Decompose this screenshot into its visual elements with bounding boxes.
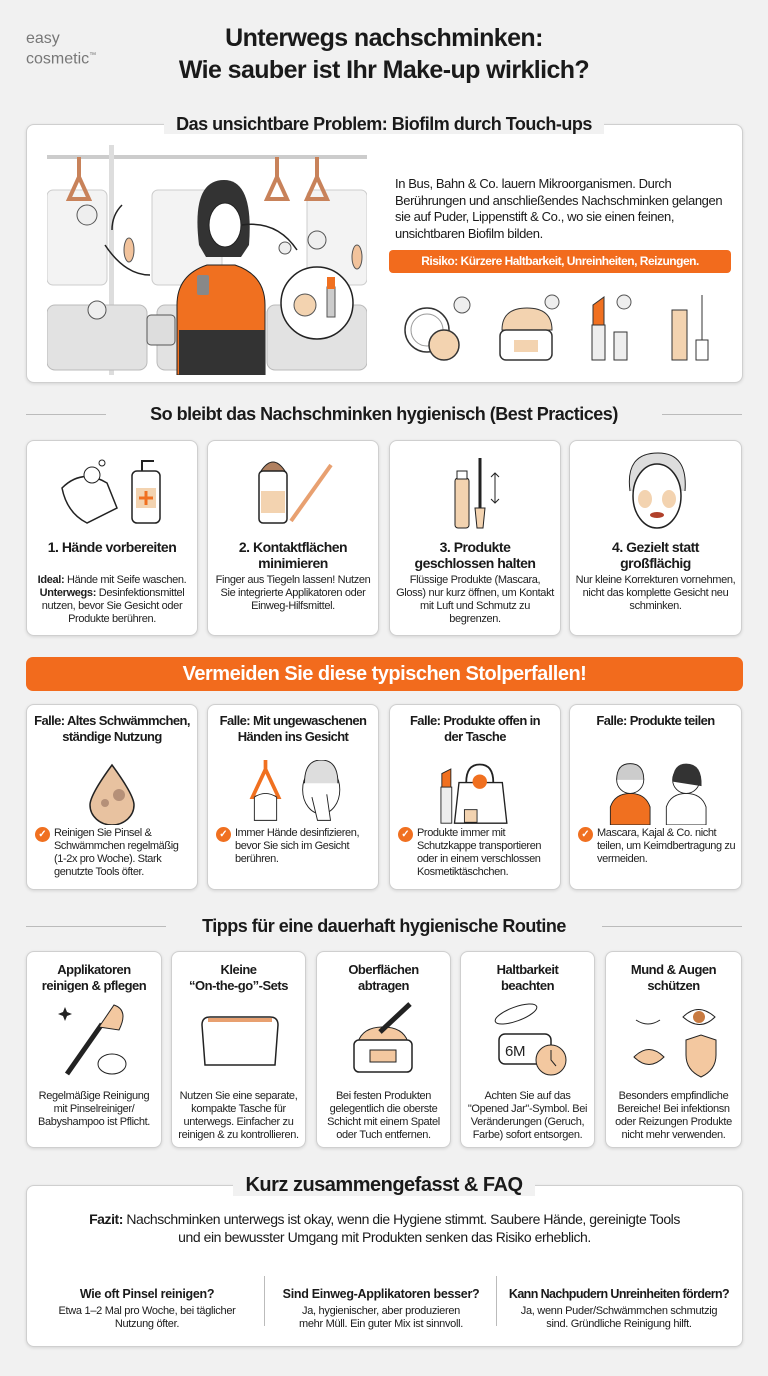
card: Kontaktflächen: minimieren: [258, 555, 328, 571]
icon: two women: [610, 763, 706, 825]
card: Oberflächen: [316, 951, 451, 1148]
heading: tipps: Tipps für eine dauerhaft hygienische Routine: [202, 916, 566, 936]
card: Haltbarkeit: beachten: [501, 978, 554, 993]
card: On-the-go: Kleine: [220, 962, 256, 977]
card: Haltbarkeit: Haltbarkeit: [497, 962, 558, 977]
card: Falle Schwämmchen: [26, 704, 198, 890]
faq 3: Kann Nachpudern Unreinheiten fördern?: [509, 1287, 729, 1301]
banner: Stolperfallen: [26, 657, 743, 691]
icon: bag: [440, 764, 508, 824]
card: Falle Hände: [207, 704, 379, 890]
illustration: bus scene: [47, 145, 367, 375]
card: Falle teilen: [569, 704, 742, 890]
card: Falle teilen: Falle: Produkte teilen: [596, 713, 715, 728]
banner: Stolperfallen: Vermeiden Sie diese typischen Stolperfallen!: [183, 663, 586, 685]
faq 1: Wie oft Pinsel reinigen?: [80, 1287, 214, 1301]
card: Hände vorbereiten: [26, 440, 198, 636]
card: Falle Schwämmchen: Reinigen Sie Pinsel & Schwämmchen regelmäßig (1-2x pro Woche). Stark genutzte Tools öfter.: [54, 827, 178, 878]
card: Applikatoren: Regelmäßige Reinigung mit Pinselreiniger/ Babyshampoo ist Pflicht.: [38, 1090, 150, 1128]
card: On-the-go: Nutzen Sie eine separate, kompakte Tasche für unterwegs. Einfacher zu reinigen & zu kontrollieren.: [178, 1090, 299, 1141]
card: Gezielt: [569, 440, 742, 636]
card: Mund & Augen: Besonders empfindliche Bereiche! Bei infektionsn oder Reizungen Produkte nicht mehr verwenden.: [615, 1090, 732, 1141]
faq 1: Nutzung öfter.: [115, 1318, 179, 1330]
card: Falle offen: der Tasche: [444, 729, 506, 744]
card: Produkte geschlossen: geschlossen halten: [415, 555, 535, 571]
card: Applikatoren: [26, 951, 162, 1148]
faq 2: Ja, hygienischer, aber produzieren: [302, 1305, 460, 1317]
card: Falle Hände: ✓: [219, 829, 228, 840]
logo: cosmetic™: [26, 50, 96, 67]
logo: [26, 30, 96, 67]
faq 3: sind. Gründliche Reinigung hilft.: [546, 1318, 692, 1330]
faq 2: mehr Müll. Ein guter Mix ist sinnvoll.: [299, 1318, 463, 1330]
panel: FAQ: [26, 1185, 743, 1347]
icon: jar spatula: [353, 1002, 413, 1073]
card: Falle offen: ✓: [401, 829, 410, 840]
card: Falle Schwämmchen: Falle: Altes Schwämmchen,: [34, 713, 190, 728]
card: Falle offen: [389, 704, 561, 890]
card: Falle teilen: Mascara, Kajal & Co. nicht teilen, um Keimdbertragung zu vermeiden.: [597, 827, 735, 865]
card: Oberflächen: abtragen: [358, 978, 409, 993]
card: Produkte geschlossen: Flüssige Produkte (Mascara, Gloss) nur kurz öffnen, um Kontakt mit Luft und Schmutz zu begrenzen.: [396, 574, 554, 625]
card: Produkte geschlossen: [389, 440, 561, 636]
icon: hands and soap: [61, 460, 161, 524]
card: Falle teilen: ✓: [581, 829, 590, 840]
card: Mund & Augen: Mund & Augen: [631, 962, 716, 977]
card: Kontaktflächen: Finger aus Tiegeln lassen! Nutzen Sie integrierte Applikatoren oder Einweg-Hilfsmittel.: [216, 574, 370, 612]
icon: face: [628, 452, 686, 529]
card: Oberflächen: Bei festen Produkten gelegentlich die oberste Schicht mit einem Spatel oder Tuch entfernen.: [327, 1090, 440, 1141]
card: On-the-go: “On-the-go”-Sets: [189, 978, 288, 993]
heading: best practices: So bleibt das Nachschminken hygienisch (Best Practices): [150, 404, 618, 424]
card: Gezielt: Nur kleine Korrekturen vornehmen, nicht das komplette Gesicht neu schminken.: [576, 574, 735, 612]
logo: easy: [26, 30, 60, 47]
icon: 6M jar with clock: 6M: [505, 1043, 525, 1060]
card: Falle Hände: Falle: Mit ungewaschenen: [220, 713, 366, 728]
card: Haltbarkeit: [460, 951, 595, 1148]
icons: cosmetics: [404, 294, 708, 361]
faq 1: [58, 1287, 236, 1330]
card: On-the-go: [171, 951, 306, 1148]
card: Mund & Augen: [605, 951, 742, 1148]
risk bar: [389, 250, 731, 273]
faq 3: [509, 1287, 729, 1330]
title: [178, 24, 589, 84]
card: Oberflächen: Oberflächen: [348, 962, 419, 977]
card: Applikatoren: Applikatoren: [57, 962, 131, 977]
card: Falle Schwämmchen: ständige Nutzung: [62, 729, 162, 744]
card: Gezielt: großflächig: [620, 555, 691, 571]
card: Hände vorbereiten: Ideal: Hände mit Seife waschen. Unterwegs: Desinfektionsmittel nutzen, bevor Sie Gesicht oder Produkte berühren.: [38, 574, 186, 625]
text: problem description: In Bus, Bahn & Co. lauern Mikroorganismen. Durch Berührungen und anschließendes Nachschminken gelangen sie auf Puder, Lippenstift & Co., wo sie einen feinen, unsichtbaren Biofilm bilden.: [395, 176, 722, 240]
card: Falle offen: Falle: Produkte offen in: [410, 713, 540, 728]
title: Wie sauber ist Ihr Make-up wirklich?: [179, 56, 589, 84]
heading: FAQ: Kurz zusammengefasst & FAQ: [245, 1174, 523, 1196]
icon: sponge: [89, 764, 135, 825]
card: Falle Schwämmchen: ✓: [38, 829, 47, 840]
text: Fazit: und ein bewusster Umgang mit Produkten senken das Risiko erheblich.: [178, 1229, 591, 1245]
title: Unterwegs nachschminken:: [225, 24, 543, 52]
card: Falle Hände: Immer Hände desinfizieren, bevor Sie sich im Gesicht berühren.: [235, 827, 359, 865]
faq 3: Ja, wenn Puder/Schwämmchen schmutzig: [521, 1305, 717, 1317]
icon: brush and swab: [258, 462, 333, 524]
text: Fazit: [89, 1211, 680, 1245]
card: Mund & Augen: schützen: [647, 978, 700, 993]
icon: handle and face: [250, 760, 340, 821]
heading: problem: Das unsichtbare Problem: Biofilm durch Touch-ups: [176, 114, 592, 134]
card: Hände vorbereiten: 1. Hände vorbereiten: [48, 539, 176, 555]
card: Kontaktflächen: [207, 440, 379, 636]
icon: mascara: [454, 458, 500, 528]
card: Falle Hände: Händen ins Gesicht: [238, 729, 348, 744]
icon: pouch: [201, 1016, 279, 1066]
icon: brush sparkle: [58, 1004, 126, 1076]
card: Falle offen: Produkte immer mit Schutzkappe transportieren oder in einem verschlossen Kosmetiktäschchen.: [417, 827, 541, 878]
card: Produkte geschlossen: 3. Produkte: [440, 539, 510, 555]
faq 1: Etwa 1–2 Mal pro Woche, bei täglicher: [58, 1305, 236, 1317]
card: Haltbarkeit: Achten Sie auf das "Opened Jar"-Symbol. Bei Veränderungen (Geruch, Farbe) sofort entsorgen.: [468, 1090, 587, 1141]
risk bar: Risiko: Kürzere Haltbarkeit, Unreinheiten, Reizungen.: [421, 254, 699, 268]
card: Applikatoren: reinigen & pflegen: [42, 978, 146, 993]
card: Kontaktflächen: 2. Kontaktflächen: [239, 539, 347, 555]
faq 2: Sind Einweg-Applikatoren besser?: [283, 1287, 479, 1301]
icon: eye lips shield: [633, 1009, 716, 1078]
panel: problem: [26, 124, 743, 383]
text: Fazit: Fazit: Nachschminken unterwegs ist okay, wenn die Hygiene stimmt. Saubere Hände, gereinigte Tools: [89, 1211, 680, 1227]
card: Gezielt: 4. Gezielt statt: [612, 539, 699, 555]
faq 2: [283, 1287, 479, 1330]
icon: 6M jar with clock: [494, 1004, 566, 1076]
